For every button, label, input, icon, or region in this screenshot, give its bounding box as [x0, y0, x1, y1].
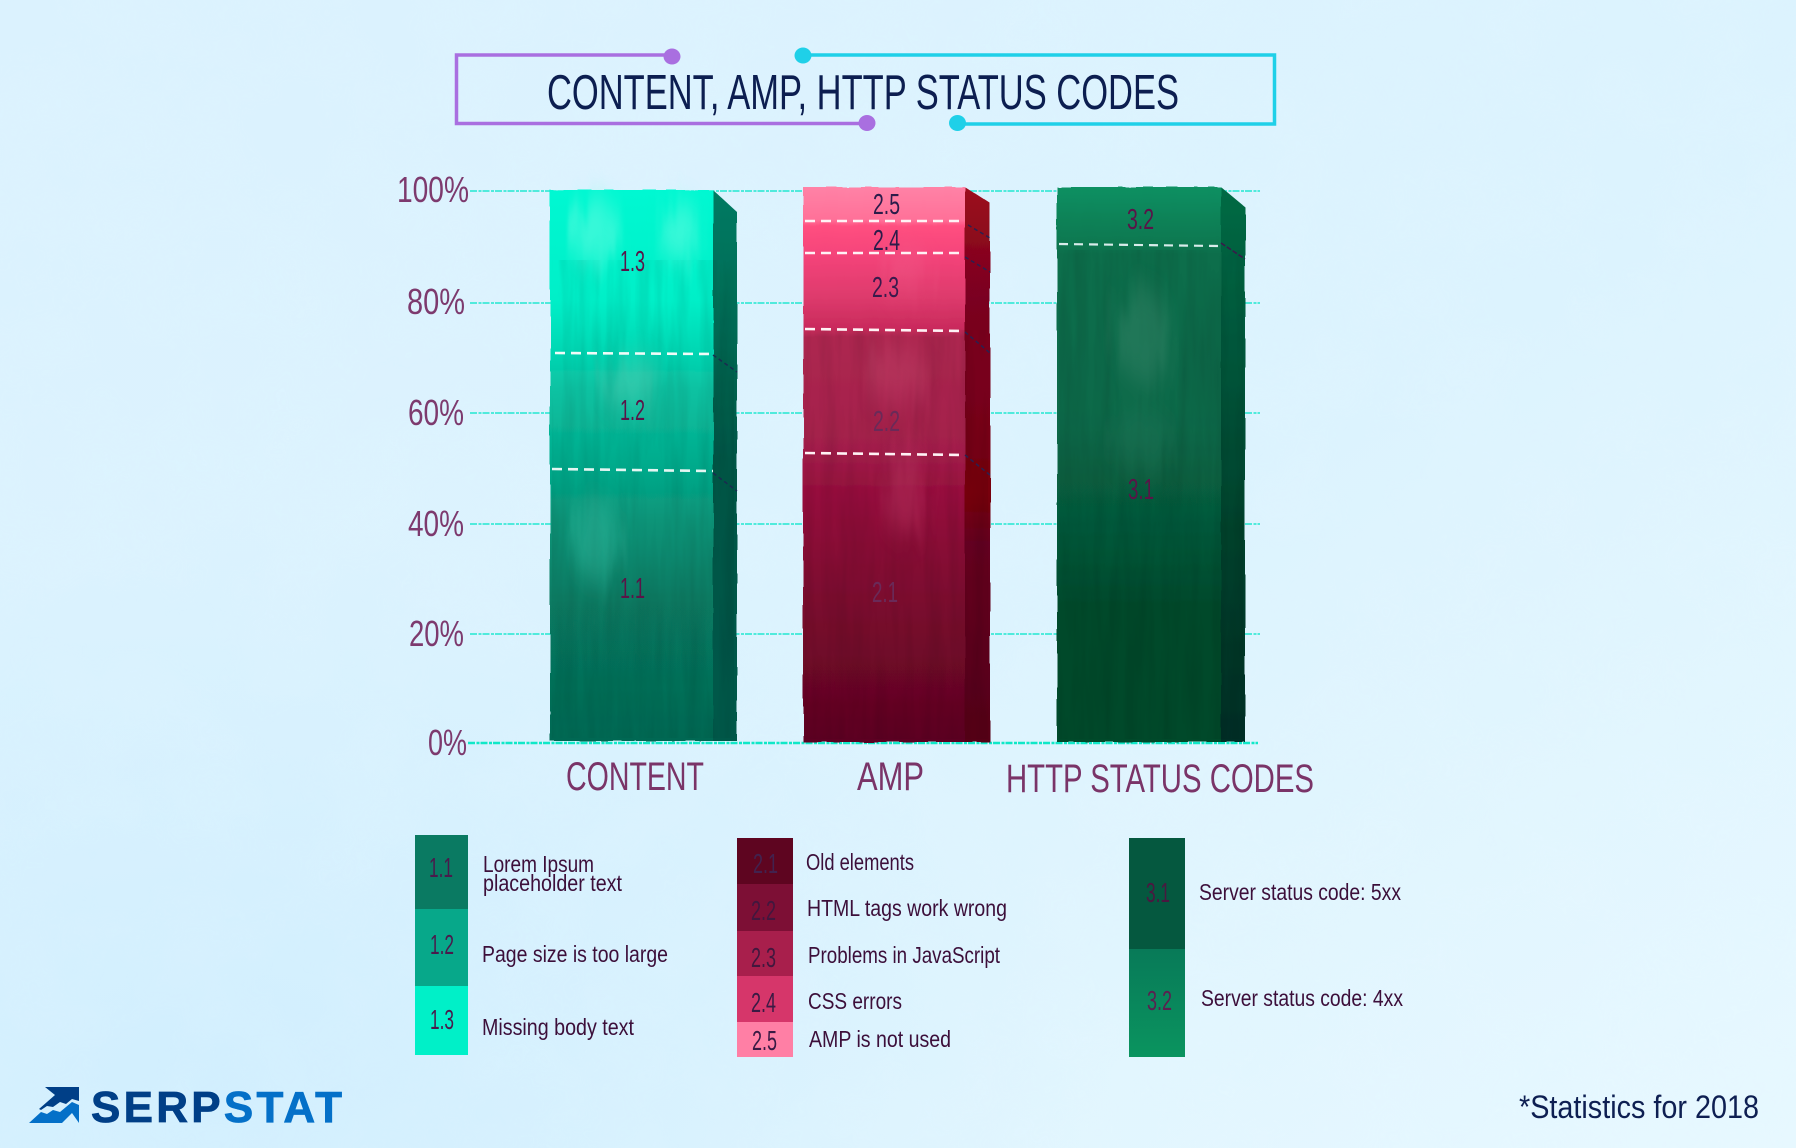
swatches: [1129, 838, 1185, 1057]
segment labels: 2.2: [873, 406, 900, 438]
swatch numbers: 2.3: [751, 942, 776, 973]
y axis labels: 60%: [408, 392, 464, 433]
legend labels: Page size is too large: [482, 941, 668, 967]
footnote: *Statistics for 2018: [1519, 1089, 1759, 1125]
legend: http status codes: [1129, 838, 1403, 1057]
segment labels: 1.1: [620, 573, 645, 605]
legend labels: Problems in JavaScript: [808, 942, 1000, 968]
swatch numbers: 3.2: [1147, 985, 1172, 1016]
dashed dividers: [552, 353, 737, 491]
title frame: purple bracket: [456, 48, 876, 131]
swatch numbers: [429, 852, 454, 1035]
segment labels: 2.1: [872, 577, 898, 609]
segment labels: 1.2: [620, 395, 645, 427]
texture highlight: [1112, 290, 1172, 470]
y axis labels: 80%: [407, 281, 465, 322]
legend labels: Missing body text: [482, 1014, 635, 1040]
dashed dividers: [805, 221, 990, 475]
swatch numbers: 3.1: [1146, 877, 1170, 908]
legend labels: [482, 851, 668, 1040]
segment labels: 3.2: [1127, 204, 1154, 236]
swatches: [415, 835, 468, 1055]
legend: content: [415, 835, 668, 1055]
swatch numbers: 2.2: [751, 895, 776, 926]
segment labels: 3.1: [1128, 474, 1154, 506]
swatch numbers: 2.1: [753, 848, 778, 879]
swatches: [737, 838, 793, 1057]
legend: amp: [737, 838, 1007, 1057]
y axis labels: 0%: [428, 722, 467, 763]
segment labels: 1.3: [620, 246, 645, 278]
logo: serpstat: [29, 1083, 342, 1132]
category labels: [566, 755, 1314, 801]
segment labels: 2.4: [873, 225, 900, 257]
segment labels: [620, 246, 645, 605]
legend labels: Lorem Ipsum: [483, 851, 594, 877]
chart: [397, 169, 1314, 801]
legend labels: Server status code: 4xx: [1201, 985, 1403, 1011]
dashed dividers: [1059, 243, 1245, 259]
legend labels: AMP is not used: [809, 1026, 951, 1052]
bar: http status codes: [1057, 187, 1245, 742]
legend labels: CSS errors: [808, 988, 902, 1014]
category labels: HTTP STATUS CODES: [1006, 757, 1314, 801]
legend labels: [806, 849, 1007, 1052]
texture streaks: [805, 330, 988, 739]
bar: content: [550, 190, 737, 741]
texture highlights: [863, 248, 929, 535]
legend labels: placeholder text: [483, 870, 623, 896]
icon: rising chart arrow: [29, 1087, 79, 1123]
swatch numbers: 2.4: [751, 987, 776, 1018]
legend labels: HTML tags work wrong: [807, 895, 1007, 921]
y axis labels: [397, 169, 469, 763]
gridlines: [468, 191, 1260, 743]
segment labels: [1127, 204, 1154, 506]
swatch numbers: 1.1: [429, 852, 453, 883]
swatch numbers: [1146, 877, 1172, 1016]
legend labels: Old elements: [806, 849, 914, 875]
title frame: cyan bracket: [794, 48, 1274, 131]
swatch numbers: 1.3: [430, 1004, 454, 1035]
swatch numbers: 2.5: [752, 1025, 777, 1056]
title frame: [456, 48, 1274, 131]
y axis labels: 20%: [409, 613, 464, 654]
segment labels: [872, 189, 900, 609]
texture streaks: [552, 260, 734, 738]
segment labels: 2.3: [872, 272, 899, 304]
y axis labels: 100%: [397, 169, 469, 210]
category labels: AMP: [857, 755, 924, 799]
swatch numbers: 1.2: [430, 929, 454, 960]
segment labels: 2.5: [873, 189, 900, 221]
legend labels: Server status code: 5xx: [1199, 879, 1401, 905]
swatch numbers: [751, 848, 778, 1056]
legend labels: [1199, 879, 1403, 1011]
category labels: CONTENT: [566, 755, 704, 799]
texture highlights: [571, 200, 700, 580]
wordmark: SERPSTAT: [91, 1083, 342, 1132]
texture streaks: [1059, 250, 1243, 739]
bar: amp: [803, 187, 990, 742]
y axis labels: 40%: [408, 503, 464, 544]
title: CONTENT, AMP, HTTP STATUS CODES: [547, 66, 1179, 120]
